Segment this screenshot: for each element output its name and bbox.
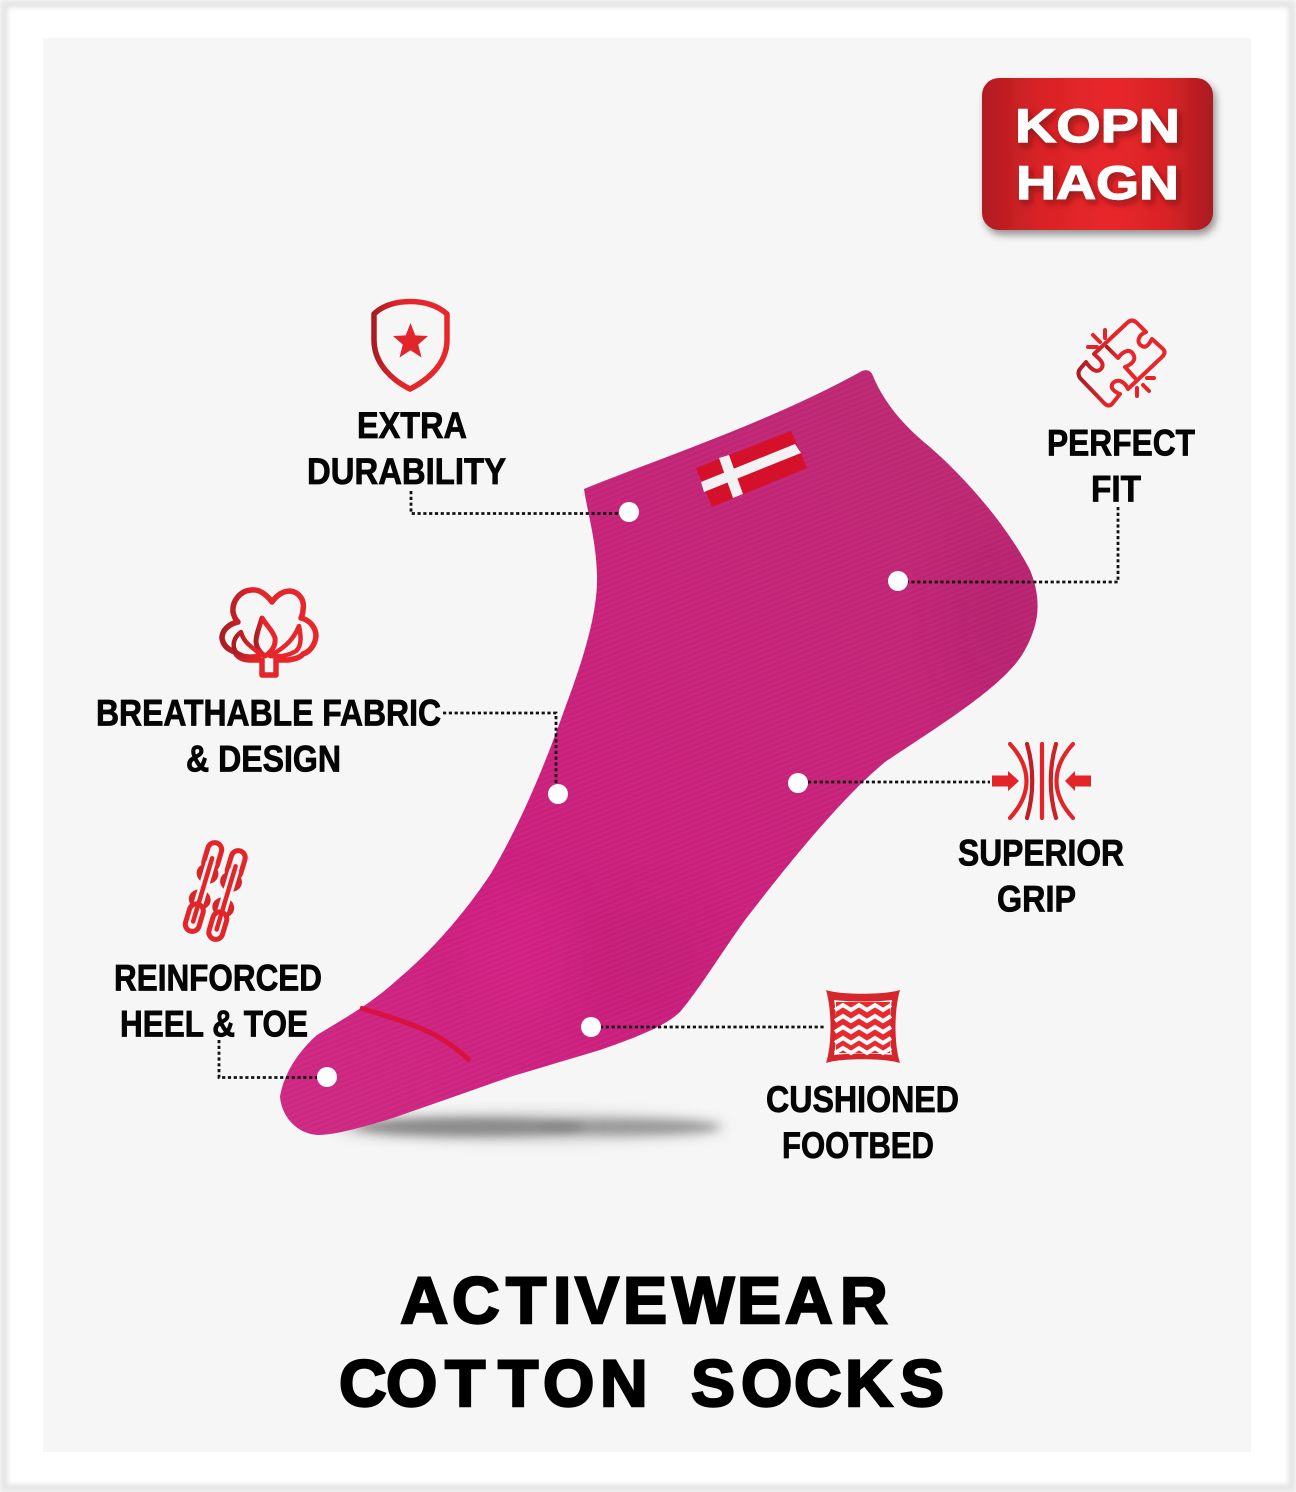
label: superior grip: GRIP [997,878,1076,920]
label: breathable fabric and design: & DESIGN [186,738,341,780]
icon: puzzle pieces [1078,320,1164,406]
pink ankle sock [270,360,1055,1150]
logo badge: KOPN HAGN: HAGN [1016,156,1179,209]
label: superior grip [958,832,1124,920]
callout: extra durability leader [411,491,639,522]
label: perfect fit: FIT [1091,468,1141,510]
label: perfect fit [1047,422,1195,510]
title: activewear cotton socks: COTTON SOCKS [339,1346,944,1420]
icon: cushion pillow [826,990,900,1063]
label: reinforced heel and toe [114,958,322,1044]
logo badge: KOPN HAGN: KOPN [1015,99,1180,152]
ground shadow under sock [335,1114,725,1140]
callout: perfect fit leader [888,507,1118,591]
label: reinforced heel and toe: REINFORCED [114,958,322,998]
label: cushioned footbed [766,1079,959,1166]
icon: compression arrows and curved lines [992,744,1091,818]
icon: reinforced chain links [180,840,251,942]
callout: reinforced heel and toe leader [219,1040,337,1087]
label: perfect fit: PERFECT [1047,422,1195,464]
label: breathable fabric and design: BREATHABLE FABRIC [96,692,441,734]
label: cushioned footbed: CUSHIONED [766,1079,959,1120]
label: extra durability: EXTRA [357,405,467,446]
label: superior grip: SUPERIOR [958,832,1124,874]
title: activewear cotton socks [339,1263,944,1420]
label: breathable fabric and design [96,692,441,780]
title: activewear cotton socks: ACTIVEWEAR [400,1263,888,1337]
icon: cotton boll [222,590,316,675]
icon: shield with star [374,302,447,389]
callout: breathable fabric leader [443,713,568,804]
callout: superior grip leader [788,773,990,793]
label: extra durability [307,405,506,492]
logo badge: KOPN HAGN [982,78,1213,230]
label: reinforced heel and toe: HEEL & TOE [120,1004,308,1044]
label: extra durability: DURABILITY [307,451,506,492]
embroidered Danish flag [696,431,807,507]
callout: cushioned footbed leader [581,1017,826,1037]
label: cushioned footbed: FOOTBED [782,1125,934,1166]
red toe seam stripe [360,1008,470,1061]
